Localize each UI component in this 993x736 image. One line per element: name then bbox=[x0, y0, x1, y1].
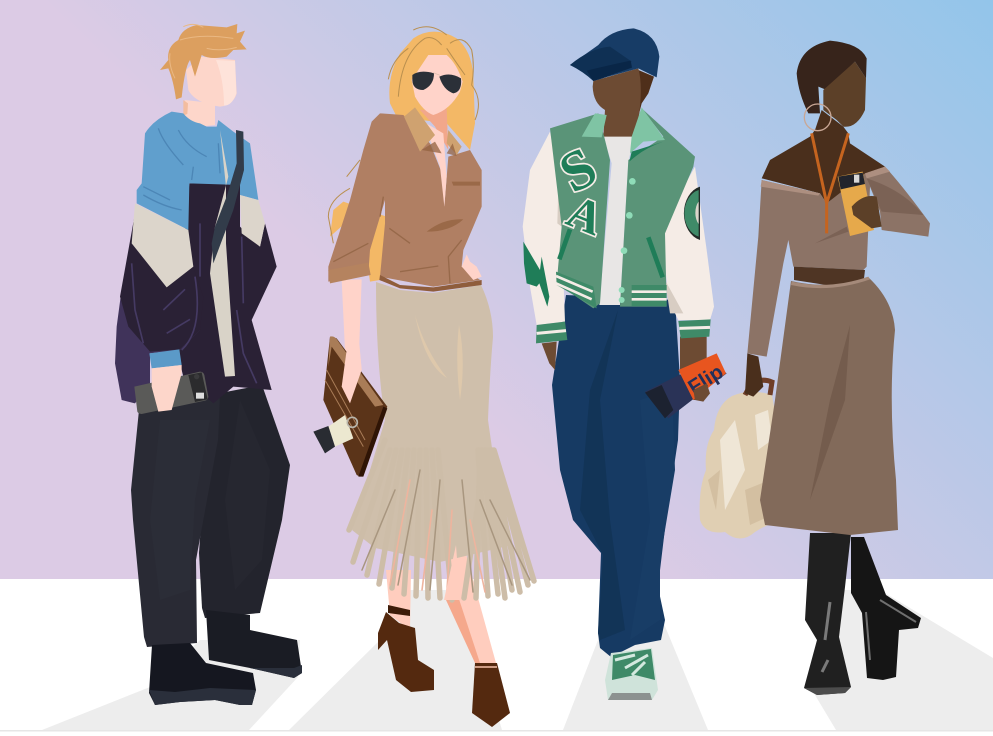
collar bbox=[582, 107, 665, 153]
sunglasses bbox=[412, 72, 461, 93]
forearm and hand bbox=[340, 279, 362, 403]
hand on hip bbox=[462, 254, 482, 280]
front boot bbox=[804, 533, 851, 695]
face bbox=[186, 57, 237, 107]
upper body bbox=[523, 28, 727, 418]
figure 1: man in blue and navy jacket bbox=[115, 24, 302, 705]
phone bbox=[645, 353, 727, 418]
back leg bbox=[386, 570, 411, 630]
hair bbox=[797, 41, 867, 113]
sleeves bbox=[523, 132, 565, 325]
blouse folds bbox=[422, 142, 480, 232]
midriff bbox=[794, 267, 865, 287]
buttons bbox=[619, 178, 636, 303]
pockets bbox=[559, 229, 663, 277]
fringe bbox=[349, 440, 534, 600]
back of head bbox=[630, 70, 654, 117]
figure 2: woman in tan blouse and fringe skirt bbox=[313, 27, 534, 727]
open neckline bbox=[423, 122, 447, 207]
jacket panels bbox=[550, 108, 695, 308]
hand bbox=[852, 196, 882, 228]
sleeve patch bbox=[684, 187, 700, 240]
back boot bbox=[851, 537, 921, 680]
trousers bbox=[131, 385, 290, 647]
skirt bbox=[760, 277, 898, 535]
left sleeve bbox=[120, 213, 203, 352]
neck bbox=[420, 108, 448, 150]
phone bbox=[313, 415, 357, 453]
fingers bbox=[693, 383, 710, 402]
cap bbox=[570, 28, 659, 81]
jeans bbox=[552, 295, 680, 657]
lanyard bbox=[812, 133, 848, 233]
hair bbox=[328, 27, 478, 282]
letter S: S bbox=[550, 136, 607, 205]
hem ribbing bbox=[556, 272, 667, 308]
t-shirt bbox=[599, 137, 633, 305]
face bbox=[823, 62, 866, 127]
sleeve cuff bbox=[328, 263, 371, 283]
phone bbox=[838, 172, 874, 236]
neck and shoulders bbox=[762, 110, 885, 203]
background wall bbox=[0, 0, 993, 579]
back boot bbox=[206, 610, 302, 678]
hair bbox=[160, 24, 247, 99]
face bbox=[412, 55, 463, 115]
hoodie bbox=[137, 112, 258, 230]
sleeve colour block bbox=[132, 203, 193, 287]
neck bbox=[183, 100, 215, 127]
cuff bbox=[149, 349, 182, 368]
upper body bbox=[313, 27, 482, 477]
face and neck bbox=[593, 68, 643, 143]
jacket body bbox=[167, 183, 277, 403]
clutch bag bbox=[323, 336, 387, 477]
earring bbox=[804, 104, 831, 131]
ground bbox=[0, 579, 993, 736]
fur bag bbox=[700, 380, 790, 538]
arms bbox=[542, 337, 707, 400]
centre zip panel bbox=[210, 130, 235, 377]
leg slit bbox=[444, 545, 460, 600]
phone: Flip bbox=[684, 360, 727, 399]
phone bbox=[134, 372, 208, 414]
forearm bbox=[745, 353, 763, 397]
jacket creases bbox=[132, 223, 257, 383]
blouse bbox=[328, 113, 482, 287]
hand over bag bbox=[342, 347, 362, 403]
crossbody strap bbox=[212, 130, 244, 263]
letter A: A bbox=[560, 185, 611, 246]
upper body bbox=[115, 24, 277, 414]
sneaker bbox=[605, 648, 658, 700]
waistband bbox=[379, 275, 482, 292]
front boot bbox=[149, 643, 302, 705]
skirt bbox=[349, 282, 534, 600]
cuffs bbox=[536, 319, 711, 343]
hand bbox=[152, 365, 182, 412]
upper body bbox=[745, 41, 930, 397]
knit top bbox=[747, 167, 930, 357]
collar bbox=[404, 107, 462, 155]
lightning bolt bbox=[523, 242, 549, 307]
front leg bbox=[446, 540, 496, 663]
figure 4: woman in taupe top and skirt with orange phone bbox=[700, 41, 930, 695]
purple sleeve lining bbox=[115, 287, 200, 403]
skirt waistband bbox=[791, 277, 870, 288]
figure 3: man in green varsity jacket and navy cap bbox=[523, 28, 727, 700]
front ankle boot bbox=[472, 663, 510, 727]
back ankle boot bbox=[378, 605, 434, 692]
